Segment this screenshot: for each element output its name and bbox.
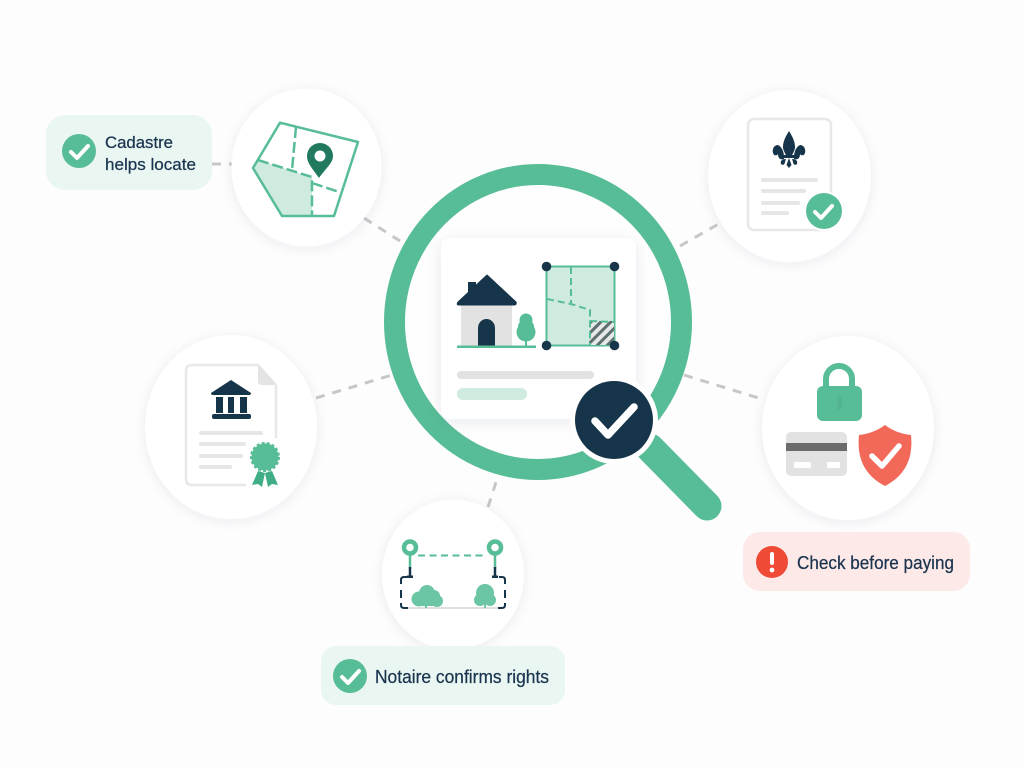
callout: notaire confirms rights: Notaire confirms rights (375, 667, 549, 687)
icon: payment card (786, 432, 847, 476)
callout: cadastre helps locate: helps locate (105, 155, 196, 174)
card text bars (457, 371, 594, 400)
callout: cadastre helps locate: Cadastre (105, 133, 173, 152)
dashed boundary line (418, 554, 487, 556)
icon: boundary marker right (489, 542, 501, 578)
magnifier lens ring (394, 174, 682, 470)
panel: cadastre map (232, 88, 382, 246)
icon: bush (412, 585, 443, 608)
callout: check before paying: Check before paying (797, 553, 954, 573)
icon: tree (474, 584, 496, 608)
panel: boundaries and land rights (382, 500, 524, 650)
dashed plot corners (401, 577, 505, 608)
callout: notaire confirms rights (321, 646, 565, 705)
panel: certified registry document (145, 335, 317, 519)
magnifying glass (394, 174, 707, 506)
panel: official title document (708, 90, 871, 262)
icon: parcel plan (542, 262, 619, 350)
document lines (761, 178, 818, 215)
panel: secure payment (762, 336, 934, 520)
icon: cadastre map (253, 123, 358, 216)
verified badge (570, 376, 658, 464)
icon: house (457, 275, 536, 348)
icon: shield with check (859, 425, 911, 486)
callout: cadastre helps locate (46, 115, 212, 190)
result card (441, 238, 636, 419)
magnifier handle (650, 448, 707, 506)
check badge (804, 191, 844, 231)
icon: seal with ribbon (246, 438, 284, 487)
callout: check before paying (743, 532, 970, 591)
icon: padlock (817, 366, 862, 421)
document fold (258, 365, 276, 385)
dashed connectors (212, 164, 765, 507)
document outline (186, 365, 276, 485)
document lines (199, 431, 263, 469)
icon: institution building (211, 380, 251, 419)
icon: fleur-de-lis (773, 131, 805, 168)
ground line (408, 607, 498, 609)
document outline (748, 119, 831, 230)
icon: boundary marker left (404, 542, 416, 578)
